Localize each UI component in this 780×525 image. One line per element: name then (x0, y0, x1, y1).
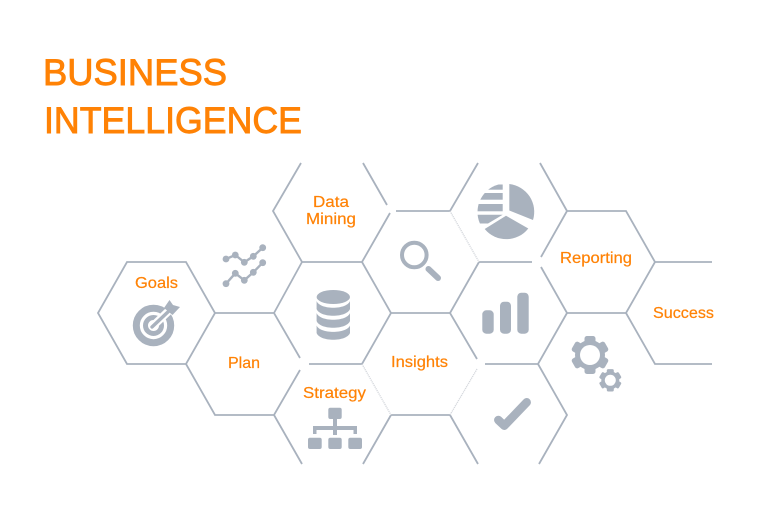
label: data mining (306, 194, 356, 228)
title: BUSINESS (43, 51, 227, 93)
title: INTELLIGENCE (44, 99, 302, 141)
icon: check mark (498, 402, 527, 426)
label: strategy: Strategy (303, 385, 366, 402)
hexagon: check (450, 364, 567, 464)
hexagon: plan (186, 313, 300, 415)
hexagon: pie (479, 163, 567, 262)
icon: line chart (223, 244, 266, 287)
label: plan: Plan (228, 355, 260, 372)
hexagon: reporting (541, 211, 655, 313)
label: reporting: Reporting (560, 250, 632, 267)
icon: database (317, 290, 350, 340)
dotted hexagon edges (362, 211, 479, 415)
hexagon: database (274, 262, 391, 364)
label: goals: Goals (135, 275, 178, 292)
label: success: Success (653, 305, 714, 322)
hexagon: goals (98, 262, 215, 364)
icon: gears (571, 336, 622, 391)
label: data mining: Data (313, 194, 349, 211)
hexagon: data mining (273, 163, 390, 262)
label: data mining: Mining (306, 211, 356, 228)
hexagon: bars (450, 262, 567, 364)
hexagon: success (626, 262, 712, 364)
icon: pie chart (477, 184, 534, 239)
icon: org chart (308, 408, 362, 449)
icon: bar chart (482, 293, 529, 334)
icon: magnifier (402, 243, 438, 278)
label: insights: Insights (391, 354, 448, 371)
icon: target with arrow (136, 300, 180, 343)
hexagon: strategy (274, 415, 391, 464)
title (43, 51, 302, 141)
hexagon: search (396, 163, 478, 211)
hexagon grid outlines (98, 163, 712, 464)
hexagon: insights (391, 313, 450, 415)
